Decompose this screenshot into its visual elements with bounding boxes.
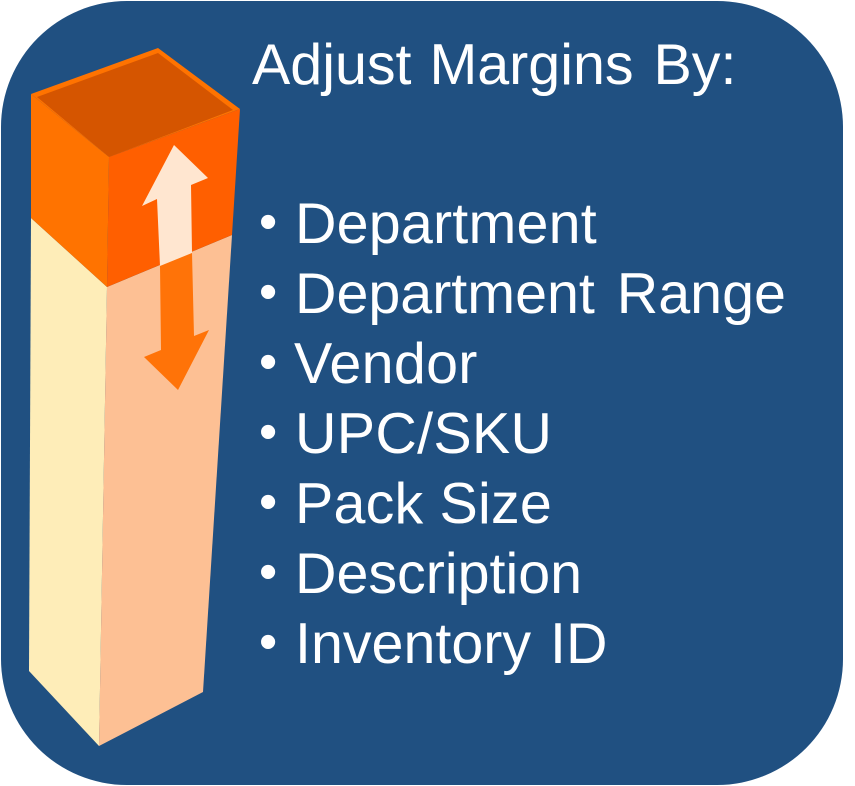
item: Description: • <box>259 543 277 601</box>
icon: margin column <box>29 48 240 746</box>
item: UPC/SKU: UPC/SKU <box>295 402 552 466</box>
cap right face <box>107 109 240 287</box>
item: Department: • <box>259 193 277 251</box>
item: Inventory ID: • <box>259 613 277 671</box>
arrow: down <box>144 253 209 390</box>
item: Inventory ID: Inventory ID <box>295 612 607 676</box>
cap left face <box>31 94 109 287</box>
bullet list <box>259 192 786 676</box>
arrow: up <box>142 145 208 266</box>
item: Department Range: • <box>259 263 277 321</box>
item: UPC/SKU: • <box>259 403 277 461</box>
item: Vendor: • <box>259 333 277 391</box>
title: Adjust Margins By: <box>252 33 736 97</box>
item: Pack Size: Pack Size <box>295 472 552 536</box>
column lower right face <box>99 235 232 746</box>
item: Department: Department <box>295 192 597 256</box>
cap top face <box>37 53 233 157</box>
item: Pack Size: • <box>259 473 277 531</box>
item: Vendor: Vendor <box>294 332 478 396</box>
item: Description: Description <box>295 542 582 606</box>
item: Department Range: Department Range <box>295 262 786 326</box>
cap top rim <box>31 48 240 157</box>
column lower left face <box>29 218 107 746</box>
